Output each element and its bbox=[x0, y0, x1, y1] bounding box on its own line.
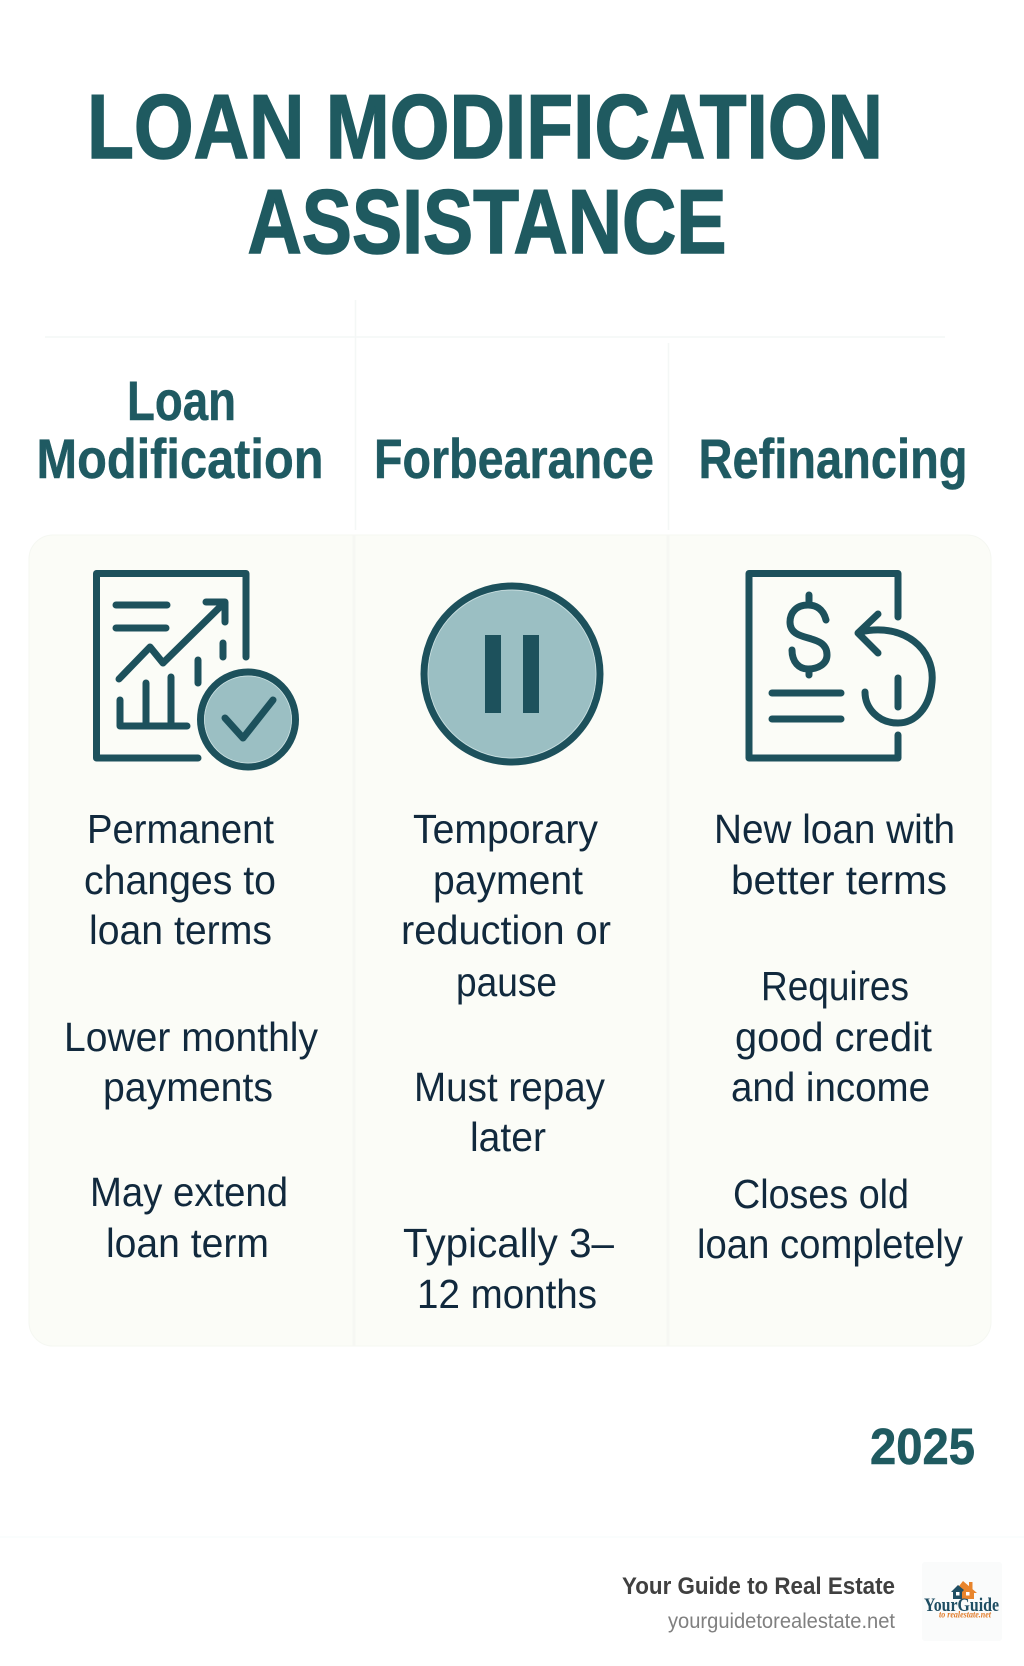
text: requirements: Requires bbox=[761, 963, 909, 1009]
footer brand text bbox=[622, 1573, 895, 1633]
text: lower payments: Lower monthly bbox=[64, 1014, 318, 1060]
logo: YourGuide bbox=[924, 1595, 999, 1616]
text: temporary reduction: pause bbox=[456, 959, 557, 1005]
text: temporary reduction bbox=[401, 806, 611, 1005]
text: must repay: later bbox=[470, 1114, 546, 1160]
icon: refinance document with dollar and return arrow bbox=[749, 574, 932, 758]
heading: loan modification bbox=[36, 369, 324, 490]
title bbox=[87, 77, 883, 273]
logo: to realestate.net bbox=[939, 1610, 991, 1620]
heading: loan modification: Modification bbox=[36, 427, 324, 490]
text: new loan: New loan with bbox=[714, 806, 955, 852]
text: typical duration: 12 months bbox=[417, 1271, 597, 1317]
title: LOAN MODIFICATION bbox=[87, 77, 883, 178]
text: may extend: May extend bbox=[90, 1169, 288, 1215]
text: must repay: Must repay bbox=[414, 1064, 605, 1110]
text: closes old loan: loan completely bbox=[697, 1221, 963, 1267]
text: typical duration: Typically 3– bbox=[403, 1220, 614, 1266]
text: may extend: loan term bbox=[106, 1220, 269, 1266]
footer brand text: Your Guide to Real Estate bbox=[622, 1573, 895, 1600]
icon: house bbox=[951, 1581, 977, 1599]
column headings bbox=[36, 369, 968, 490]
text: must repay bbox=[414, 1064, 605, 1160]
text: permanent changes bbox=[84, 806, 276, 953]
column 3 text bbox=[697, 806, 963, 1267]
logo bbox=[922, 1562, 1002, 1641]
heading: refinancing: Refinancing bbox=[698, 427, 968, 490]
icon: loan document with chart and check bbox=[96, 574, 296, 767]
text: temporary reduction: Temporary bbox=[413, 806, 598, 852]
text: closes old loan bbox=[697, 1171, 963, 1267]
title: ASSISTANCE bbox=[248, 172, 726, 273]
heading: loan modification: Loan bbox=[127, 369, 236, 432]
text: lower payments: payments bbox=[103, 1064, 273, 1110]
text: requirements bbox=[731, 963, 933, 1110]
column 2 text bbox=[401, 806, 614, 1317]
text: permanent changes: loan terms bbox=[89, 907, 272, 953]
text: temporary reduction: reduction or bbox=[401, 907, 611, 953]
text: temporary reduction: payment bbox=[433, 857, 584, 903]
text: lower payments bbox=[64, 1014, 318, 1110]
text: permanent changes: Permanent bbox=[87, 806, 275, 852]
text: new loan: better terms bbox=[731, 857, 947, 903]
text: requirements: and income bbox=[731, 1064, 930, 1110]
panel: comparison table bbox=[29, 535, 991, 1346]
text: typical duration bbox=[403, 1220, 614, 1317]
text: requirements: good credit bbox=[735, 1014, 933, 1060]
footer brand text: yourguidetorealestate.net bbox=[668, 1610, 895, 1633]
year: 2025 bbox=[870, 1418, 975, 1475]
text: new loan bbox=[714, 806, 955, 903]
text: closes old loan: Closes old bbox=[733, 1171, 909, 1217]
heading: forbearance: Forbearance bbox=[374, 427, 654, 490]
text: permanent changes: changes to bbox=[84, 857, 276, 903]
icon: pause button bbox=[424, 586, 600, 762]
text: may extend bbox=[90, 1169, 288, 1266]
column 1 text bbox=[64, 806, 318, 1266]
